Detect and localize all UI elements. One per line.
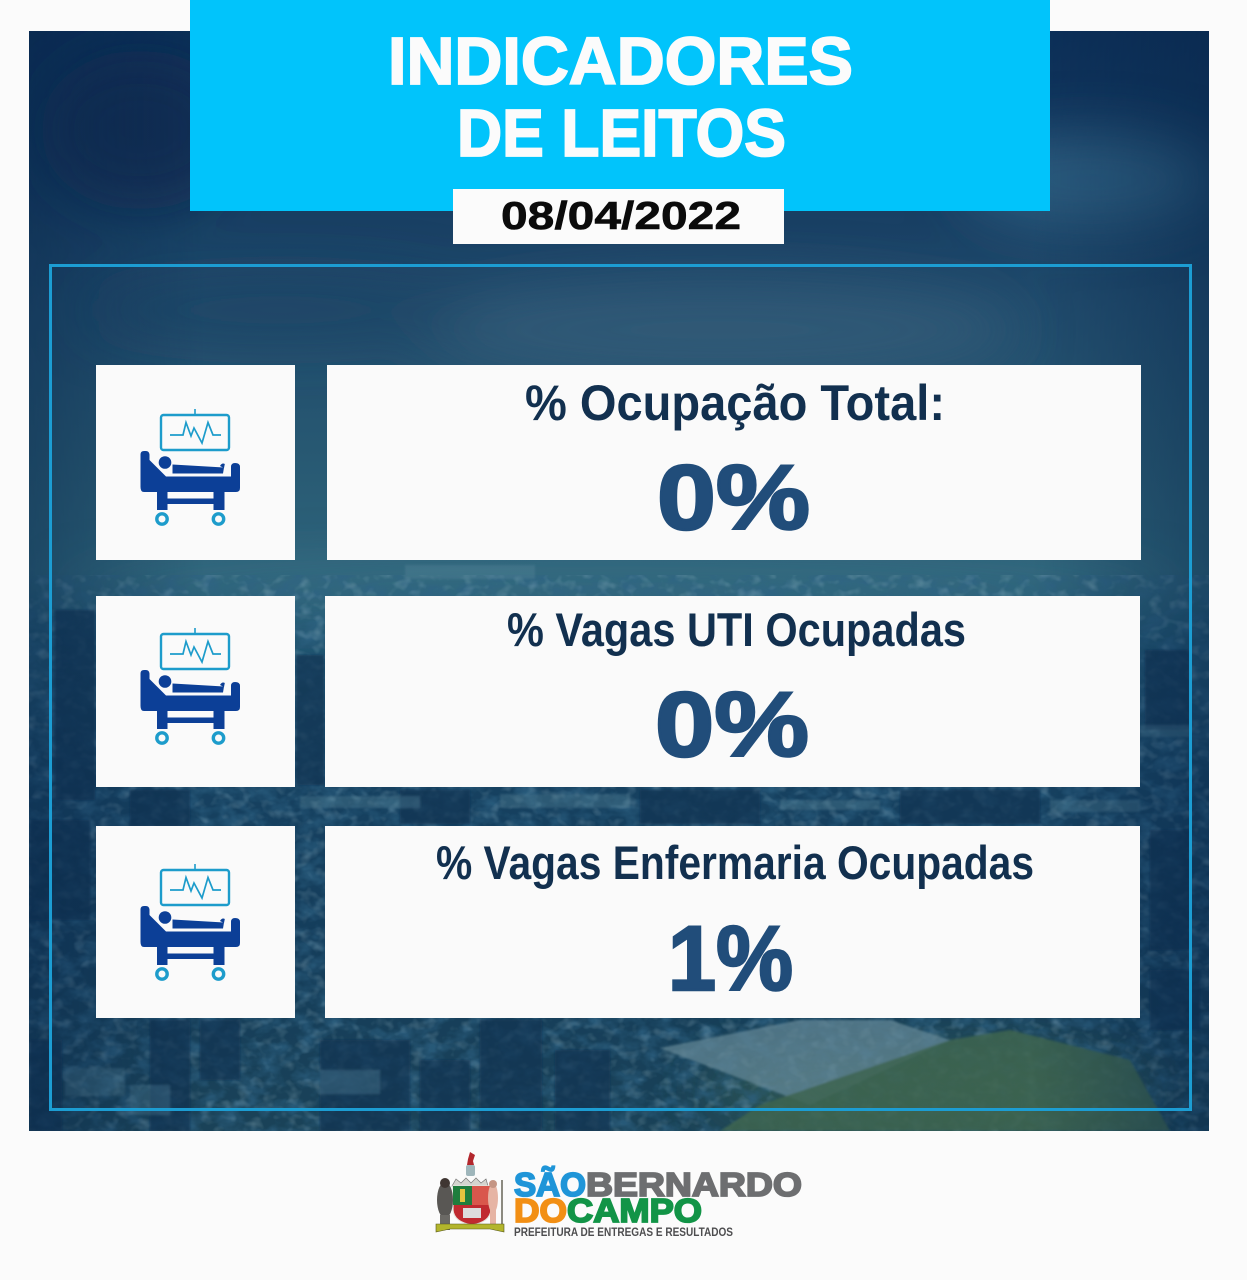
logo: São Bernardo do Campo [436, 1152, 802, 1239]
row 2 text card: 0% [655, 674, 809, 776]
row 2 text card: % Vagas UTI Ocupadas [507, 603, 966, 656]
logo wordmark [514, 1166, 802, 1239]
logo wordmark: DO [514, 1192, 567, 1229]
row 2 text card [325, 596, 1140, 787]
title banner [190, 0, 1050, 211]
row 3 text card: 1% [668, 908, 793, 1010]
row 1 icon card [96, 365, 295, 560]
row 2 icon card [96, 596, 295, 787]
decorative frame [50, 266, 1190, 1110]
title banner: DE LEITOS [457, 96, 786, 171]
row 1 text card: % Ocupação Total: [525, 375, 945, 431]
date badge [453, 189, 784, 244]
row 3 text card [325, 826, 1140, 1018]
row 1 text card: 0% [657, 447, 810, 549]
row 3: ward occupancy [96, 826, 1140, 1018]
logo wordmark: CAMPO [567, 1192, 702, 1229]
row 1: total occupancy [96, 365, 1141, 560]
row 2: ICU occupancy [96, 596, 1140, 787]
row 3 icon card [96, 826, 295, 1018]
date badge: 08/04/2022 [501, 195, 741, 238]
logo wordmark: PREFEITURA DE ENTREGAS E RESULTADOS [514, 1227, 733, 1239]
row 3 text card: % Vagas Enfermaria Ocupadas [436, 836, 1034, 889]
title banner: INDICADORES [388, 24, 853, 99]
city texture [29, 575, 1209, 1131]
icon: municipal coat of arms [436, 1152, 504, 1232]
row 1 text card [327, 365, 1141, 560]
logo wordmark: BERNARDO [586, 1166, 802, 1203]
logo wordmark: SÃO [514, 1166, 586, 1203]
